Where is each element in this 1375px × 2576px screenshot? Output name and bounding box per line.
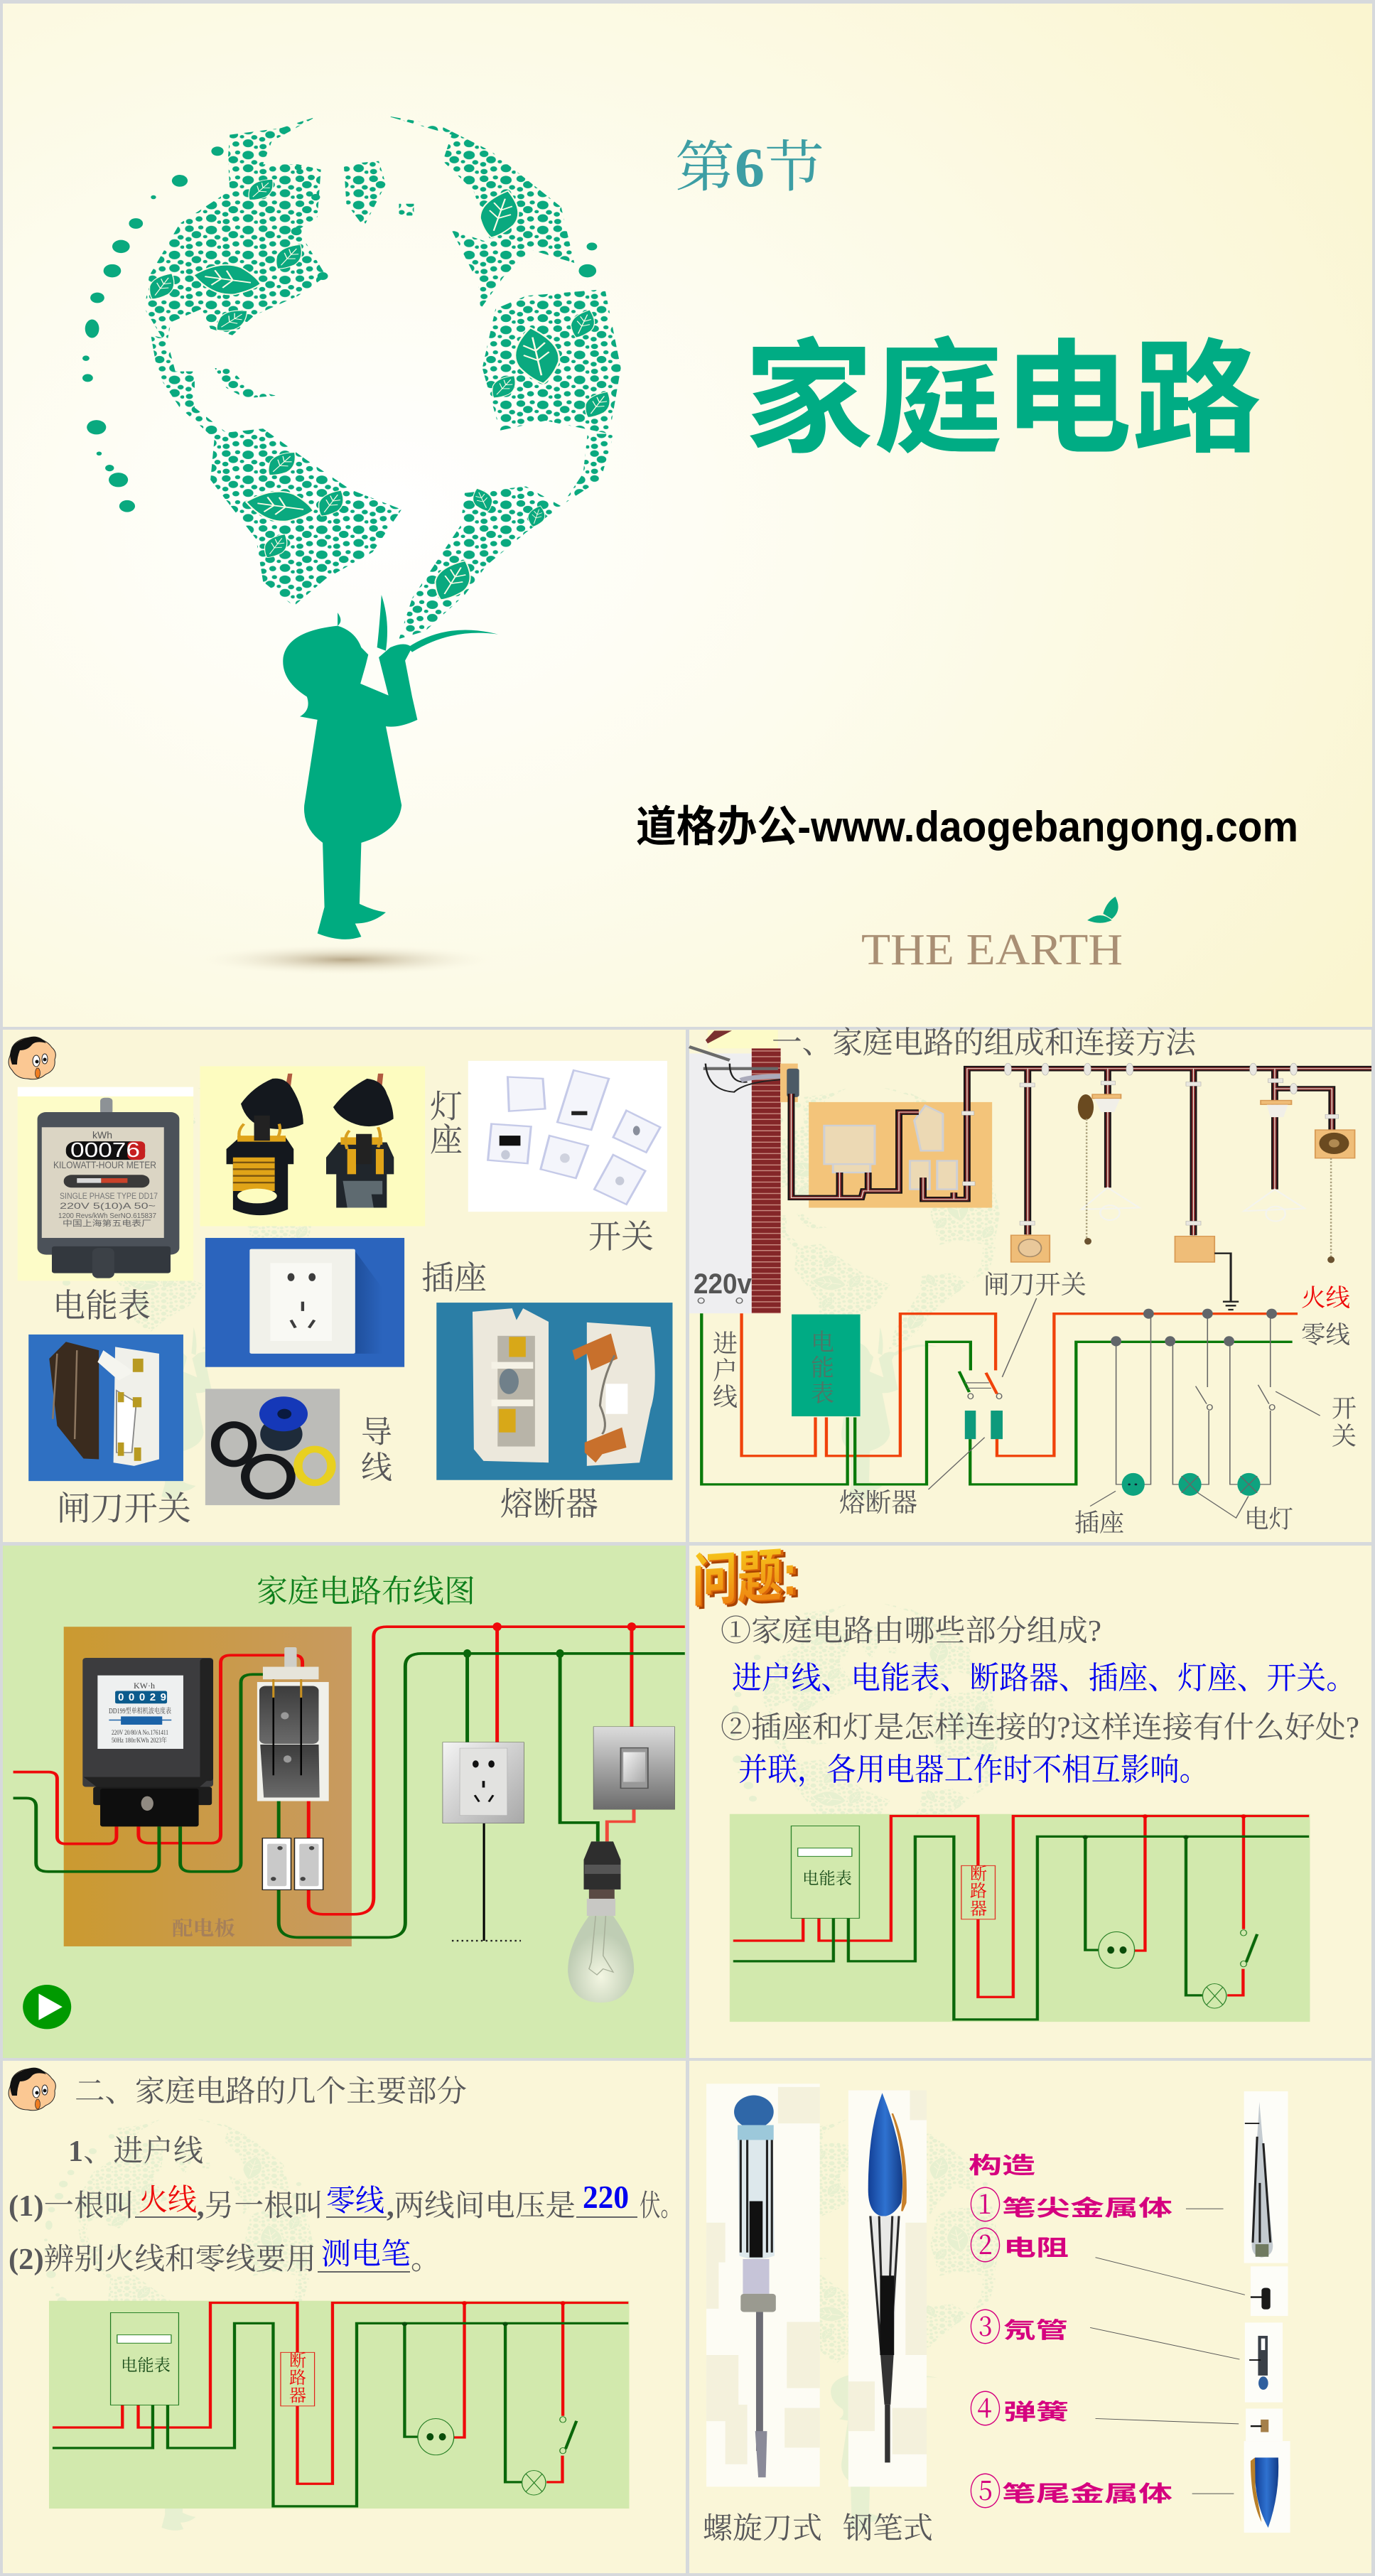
label: service entrance: 户 <box>713 1357 738 1385</box>
panel: component photos <box>3 1030 686 1542</box>
subheading: 1、进户线 <box>68 2135 203 2168</box>
label: knife switch: 闸刀开关 <box>983 1271 1086 1299</box>
label: meter block: 电 <box>811 1330 834 1356</box>
photo: electricity meter: 中国上海第五电表厂 <box>63 1218 151 1228</box>
label: lamp holder: 灯 <box>430 1089 463 1125</box>
house wiring illustration <box>689 1030 1371 1313</box>
meter face text: KW·h <box>134 1681 155 1691</box>
part 5: 笔尾金属体 <box>1002 2481 1172 2506</box>
photo: electricity meter <box>18 1087 193 1281</box>
photo: knife switch <box>28 1335 183 1481</box>
part 3: ③ <box>969 2309 1001 2349</box>
icon: cartoon head <box>9 2068 55 2111</box>
photo: electricity meter: 00076 <box>70 1139 140 1162</box>
label: switch <box>1332 1395 1357 1450</box>
label: screwdriver type: 螺旋刀式 <box>703 2513 822 2545</box>
illustration: leaf globe and child <box>82 116 1118 976</box>
photo: electricity meter: 220V 5(10)A 50~ <box>60 1201 156 1211</box>
circuit diagram <box>49 2301 630 2508</box>
label: switch: 开 <box>1332 1395 1357 1423</box>
layout drawing <box>14 1622 685 2029</box>
answer 2: 并联，各用电器工作时不相互影响。 <box>738 1752 1209 1787</box>
panel: questions <box>689 1541 1371 2058</box>
heading: question word art: 问题: <box>696 1545 802 1617</box>
sentence 1: ,两线间电压是 <box>387 2190 576 2223</box>
label: socket: 插座 <box>421 1260 487 1296</box>
sentence 2: 测电笔 <box>321 2238 411 2271</box>
circuit diagram: 器 <box>289 2387 306 2405</box>
circuit diagram: 电能表 <box>121 2356 171 2374</box>
part 3: 氖管 <box>1003 2318 1068 2343</box>
label: meter: 电能表 <box>53 1288 151 1324</box>
circuit diagram <box>730 1814 1310 2022</box>
photo: wall switches <box>468 1061 667 1212</box>
meter face text: 50Hz 180r/KWh 2023年 <box>112 1736 167 1744</box>
label: pen type: 钢笔式 <box>843 2513 933 2545</box>
label: fuse: 熔断器 <box>500 1486 598 1522</box>
label: lamp holder <box>430 1089 463 1158</box>
circuit diagram: 器 <box>970 1900 987 1919</box>
label: meter block: 能 <box>811 1355 834 1381</box>
part 4: ④ <box>969 2391 1001 2431</box>
meter face text: 00029 <box>118 1691 166 1703</box>
panel: main parts <box>3 2061 686 2573</box>
photo: wires <box>205 1389 340 1505</box>
label: lamp: 电灯 <box>1244 1506 1293 1534</box>
sentence 1: ,另一根叫 <box>197 2190 323 2223</box>
label: service entrance: 进 <box>713 1330 738 1358</box>
heading: question word art: 问题: <box>694 1543 800 1615</box>
part 1: ① <box>969 2187 1001 2227</box>
photo: socket <box>205 1238 404 1367</box>
label: distribution board: 配电板 <box>172 1917 235 1940</box>
circuit diagram: 路 <box>970 1882 987 1901</box>
photo: electricity meter: KILOWATT-HOUR METER <box>53 1159 156 1170</box>
label: live wire: 火线 <box>1301 1285 1350 1312</box>
heading: question word art: 问题: <box>692 1542 797 1613</box>
label: neutral wire: 零线 <box>1301 1322 1350 1349</box>
label: socket: 插座 <box>1074 1509 1124 1537</box>
meter face text <box>109 1681 171 1744</box>
photo: electricity meter: SINGLE PHASE TYPE DD17 <box>60 1191 158 1201</box>
meter face text: 220V 20/80/A No.1761411 <box>112 1729 168 1736</box>
heading: 一、家庭电路的组成和连接方法 <box>772 1026 1197 1060</box>
website line: 道格办公-www.daogebangong.com <box>636 803 1298 851</box>
label: fuse: 熔断器 <box>839 1489 917 1518</box>
label: meter block <box>811 1330 834 1407</box>
label: wire <box>361 1415 392 1485</box>
part 1 <box>969 2187 1172 2227</box>
photo: lamp holders <box>200 1066 425 1226</box>
sentence 2 <box>9 2238 441 2276</box>
photo: fuse <box>436 1303 672 1480</box>
part 5: ⑤ <box>969 2473 1001 2513</box>
label: wire: 线 <box>361 1450 392 1485</box>
section number: 第6节 <box>675 136 824 198</box>
heading: 二、家庭电路的几个主要部分 <box>75 2076 467 2108</box>
label: switch: 关 <box>1332 1423 1357 1450</box>
circuit diagram: 断 <box>289 2351 306 2371</box>
part 5 <box>969 2473 1172 2513</box>
part 4 <box>969 2391 1069 2431</box>
sentence 1: 火线 <box>139 2184 197 2217</box>
sentence 2: (2)辨别火线和零线要用 <box>9 2243 316 2276</box>
question 1: ①家庭电路由哪些部分组成? <box>721 1615 1101 1648</box>
wiring schematic <box>698 1298 1320 1518</box>
sentence 1: 零线 <box>326 2185 384 2218</box>
label: service entrance: 线 <box>713 1384 738 1411</box>
label: structure: 构造 <box>969 2152 1035 2178</box>
title: 家庭电路 <box>744 330 1261 468</box>
icon: cartoon head <box>9 1037 55 1079</box>
part 4: 弹簧 <box>1003 2400 1069 2425</box>
sentence 1: 伏。 <box>640 2190 681 2223</box>
part 2: ② <box>969 2227 1001 2268</box>
part 2: 电阻 <box>1003 2236 1069 2260</box>
question 2: ②插座和灯是怎样连接的?这样连接有什么好处? <box>721 1712 1359 1745</box>
circuit diagram: 断 <box>970 1865 987 1884</box>
part 3 <box>969 2309 1068 2349</box>
panel: test pen <box>689 2061 1371 2573</box>
part 1: 笔尖金属体 <box>1002 2196 1172 2221</box>
label: lamp holder: 座 <box>430 1122 463 1158</box>
label: knife switch: 闸刀开关 <box>57 1491 191 1528</box>
photo group: screwdriver and pen testers <box>706 2084 1290 2533</box>
part 2 <box>969 2227 1069 2268</box>
label: wire: 导 <box>361 1415 392 1450</box>
photo: electricity meter: kWh <box>92 1129 112 1141</box>
sentence 1 <box>9 2179 681 2223</box>
voltage label: 220v <box>694 1268 753 1300</box>
panel: cover slide <box>3 4 1372 1027</box>
answer 1: 进户线、电能表、断路器、插座、灯座、开关。 <box>732 1661 1356 1696</box>
sentence 2: 。 <box>411 2243 441 2276</box>
label: meter block: 表 <box>811 1381 834 1407</box>
circuit diagram: 电能表 <box>802 1870 852 1887</box>
label: switch: 开关 <box>588 1219 654 1255</box>
circuit diagram: 路 <box>289 2368 306 2388</box>
panel: composition and connection <box>689 1026 1371 1542</box>
heading: 家庭电路布线图 <box>257 1574 475 1609</box>
the earth logo: THE EARTH <box>861 926 1123 974</box>
panel: wiring layout <box>3 1546 686 2058</box>
label: service entrance <box>713 1330 738 1411</box>
sentence 1: (1)一根叫 <box>9 2190 134 2223</box>
meter face text: DD199型单相机波电度表 <box>109 1706 171 1715</box>
photo: electricity meter: 1200 Revs/kWh SerNO.615837 <box>58 1212 156 1220</box>
sentence 1: 220 <box>583 2179 629 2215</box>
